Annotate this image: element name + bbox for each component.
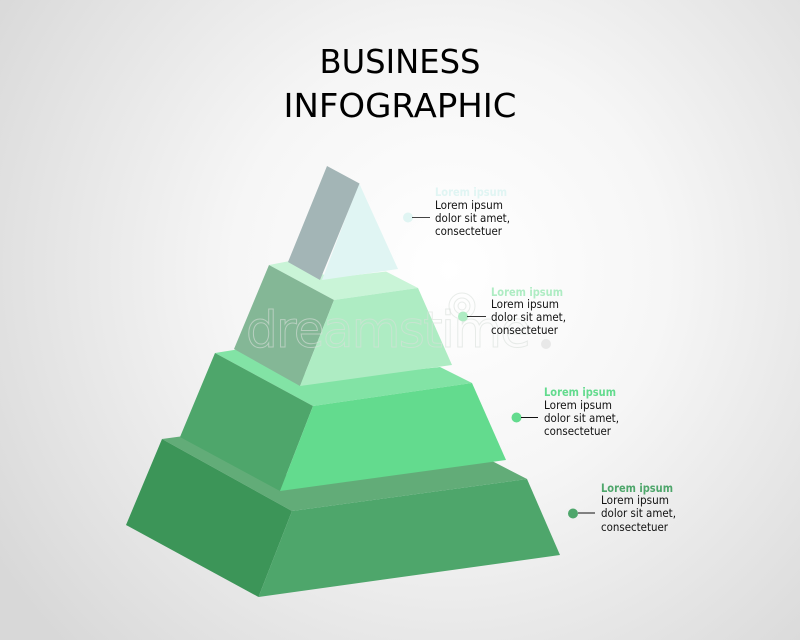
callout 1: consectetuer	[435, 224, 502, 238]
tier 4: base	[126, 436, 560, 597]
callout 3: dolor sit amet,	[544, 411, 619, 425]
callout 4: Lorem ipsum	[601, 481, 673, 495]
callout 1: Lorem ipsum	[435, 185, 507, 199]
callout 2: Lorem ipsum	[491, 297, 559, 311]
callout 1: dolor sit amet,	[435, 211, 510, 225]
title	[284, 42, 516, 125]
watermark: dreamstime	[246, 301, 531, 359]
callout 3: Lorem ipsum	[544, 398, 612, 412]
callout 3	[512, 385, 619, 438]
callout 2: Lorem ipsum	[491, 285, 563, 299]
callout 4: Lorem ipsum	[601, 493, 669, 507]
callout 3: consectetuer	[544, 424, 611, 438]
tier 1: apex	[288, 166, 398, 280]
pyramid	[126, 166, 560, 597]
callout 2: dolor sit amet,	[491, 310, 566, 324]
callout 1: Lorem ipsum	[435, 198, 503, 212]
callout 4: consectetuer	[601, 520, 668, 534]
tier 3	[180, 349, 506, 491]
callout 2	[458, 285, 566, 337]
callout 2: consectetuer	[491, 323, 558, 337]
callout 1	[403, 185, 510, 238]
tier 2	[234, 260, 452, 386]
title: BUSINESS	[320, 42, 480, 81]
title: INFOGRAPHIC	[284, 86, 516, 125]
callout 4: dolor sit amet,	[601, 506, 676, 520]
callout 4	[568, 481, 676, 534]
callout 3: Lorem ipsum	[544, 385, 616, 399]
